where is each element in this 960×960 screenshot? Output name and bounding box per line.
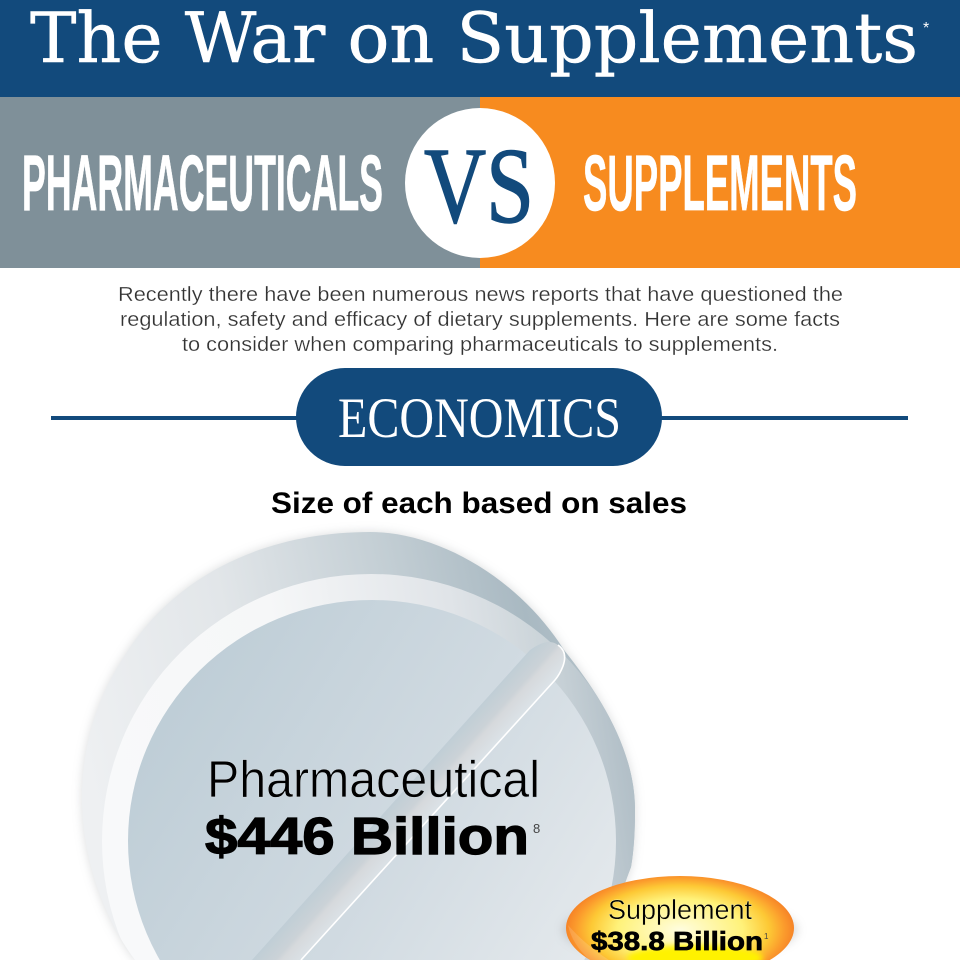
supplement label: Supplement (608, 894, 752, 925)
title asterisk: * (923, 20, 929, 37)
pharmaceutical value: $446 Billion (205, 808, 529, 866)
panel: pharmaceuticals side (0, 97, 480, 268)
pharmaceutical label: Pharmaceutical (207, 751, 540, 809)
vs badge: VS (424, 127, 534, 246)
panel: supplements side (480, 97, 960, 268)
pill score line (252, 642, 565, 960)
chart subtitle: Size of each based on sales (271, 487, 687, 520)
title banner (0, 0, 960, 97)
supplement value: $38.8 Billion (591, 926, 763, 956)
versus band (0, 97, 960, 268)
versus band: PHARMACEUTICALS (22, 138, 383, 227)
supplement capsule (563, 876, 797, 960)
intro paragraph (118, 284, 843, 356)
footnote 1: 1 (764, 932, 769, 941)
footnote 8: 8 (533, 821, 540, 836)
intro paragraph: regulation, safety and efficacy of dietary supplements. Here are some facts (120, 309, 840, 331)
intro paragraph: Recently there have been numerous news reports that have questioned the (118, 284, 843, 306)
section heading: economics: ECONOMICS (338, 387, 621, 450)
section heading: economics (51, 368, 908, 466)
pharmaceutical pill (82, 532, 640, 960)
title: The War on Supplements (30, 0, 918, 79)
vs badge (405, 108, 555, 258)
intro paragraph: to consider when comparing pharmaceuticals to supplements. (182, 334, 778, 356)
